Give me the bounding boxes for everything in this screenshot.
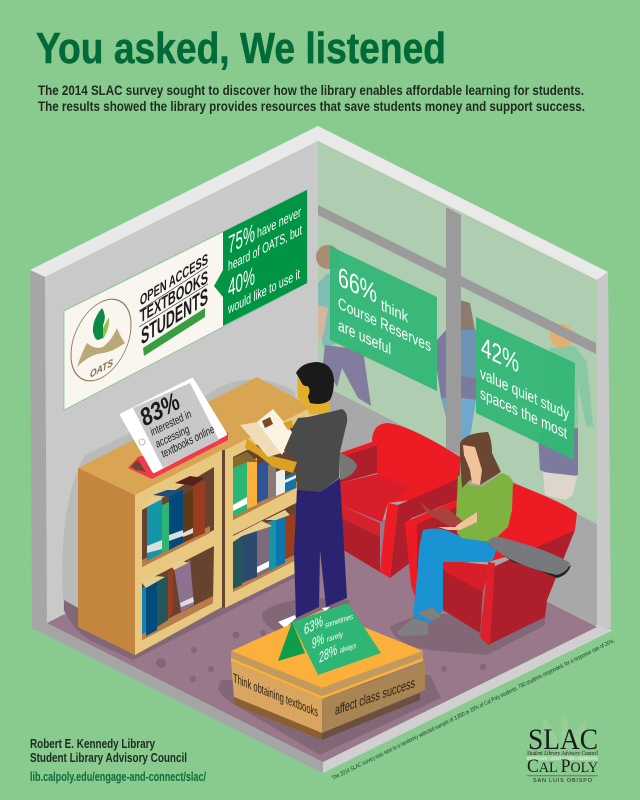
hair xyxy=(296,362,334,404)
books: left case, lower shelf xyxy=(142,560,194,636)
OATS statistics: have never xyxy=(257,205,301,242)
arm xyxy=(245,438,297,473)
tablet: 83% interested: interested in xyxy=(149,407,193,439)
box label left: Think obtaining textbooks xyxy=(233,670,318,720)
window mullions xyxy=(318,205,596,455)
box label right: affect class success xyxy=(335,675,415,719)
left sofa xyxy=(340,423,460,578)
display box xyxy=(231,610,425,740)
trousers xyxy=(294,478,347,618)
left arm xyxy=(340,442,377,457)
woman reading xyxy=(397,432,513,636)
right bookcase front xyxy=(222,407,312,608)
SLAC Cal Poly logo: SAN LUIS OBISPO xyxy=(533,778,593,784)
tent sign: frequency statistics: rarely xyxy=(327,630,344,644)
bookcase side xyxy=(78,468,135,655)
intro text xyxy=(38,83,585,114)
tablet: 83% interested: 83% xyxy=(137,386,183,432)
OATS logo xyxy=(71,287,131,393)
OATS statistics: 75% xyxy=(228,218,255,260)
tent sign: frequency statistics: 63% xyxy=(304,613,323,639)
man reading xyxy=(240,362,347,628)
shoes xyxy=(417,607,442,620)
SLAC Cal Poly logo: EDUCATE · ADVOCATE · IMPROVE xyxy=(527,756,598,761)
OATS statistics: would like to use it xyxy=(227,266,301,318)
left bookcase front xyxy=(135,450,222,655)
panel: 66% course reserves: 66% xyxy=(338,261,377,310)
left arm xyxy=(415,506,457,610)
tablet: 83% interested xyxy=(122,380,228,479)
panel: OATS banner xyxy=(64,190,307,410)
open book xyxy=(240,409,293,457)
floor shadows and marks xyxy=(64,555,545,755)
tent sign: frequency statistics xyxy=(278,603,381,675)
shirt xyxy=(286,409,347,492)
back xyxy=(440,483,577,562)
side table by man xyxy=(340,453,357,480)
back xyxy=(372,423,460,503)
book xyxy=(420,502,465,527)
ear xyxy=(304,386,310,396)
OATS logo: OATS xyxy=(90,357,114,381)
OATS statistics: heard of OATS, but xyxy=(228,222,303,275)
library credit: Robert E. Kennedy Library xyxy=(30,736,156,751)
tablet: 83% interested: accessing xyxy=(154,422,191,451)
panel: 42% quiet study: 42% xyxy=(481,331,519,380)
seat xyxy=(340,474,412,522)
right arm xyxy=(390,478,460,578)
books: right case, lower shelf xyxy=(233,510,296,589)
bookcases xyxy=(78,377,312,655)
shoes xyxy=(278,615,296,628)
OATS statistics xyxy=(227,205,303,318)
OATS statistics: 40% xyxy=(228,261,255,303)
books: right case, upper shelf xyxy=(233,452,296,517)
bookcase top xyxy=(78,377,312,495)
room shell xyxy=(30,126,613,773)
tent sign: frequency statistics: always xyxy=(340,641,356,655)
OATS wordmark xyxy=(139,250,208,356)
person right xyxy=(538,324,593,500)
hair xyxy=(460,432,501,488)
tent sign: frequency statistics: 9% xyxy=(312,631,324,653)
seat xyxy=(442,560,490,592)
people behind glass xyxy=(316,245,593,500)
library credit: lib.calpoly.edu/engage-and-connect/slac/ xyxy=(30,769,206,784)
hands xyxy=(438,512,477,530)
panel: 66% course reserves: Course Reserves xyxy=(338,294,431,356)
panel: 66% course reserves xyxy=(330,246,437,391)
panel: 66% course reserves: think xyxy=(381,296,408,327)
panel: 42% quiet study: value quiet study xyxy=(480,364,569,424)
title: You asked, We listened xyxy=(36,24,446,73)
SLAC Cal Poly logo: CAL POLY xyxy=(527,756,598,777)
jeans xyxy=(413,528,496,623)
library credit: Student Library Advisory Council xyxy=(30,750,187,765)
OATS wordmark: OPEN ACCESS xyxy=(140,250,208,310)
SLAC Cal Poly logo xyxy=(527,717,598,784)
library credit xyxy=(30,736,206,784)
tent sign: frequency statistics: sometimes xyxy=(325,612,353,630)
person middle xyxy=(437,300,476,442)
SLAC Cal Poly logo: SLAC xyxy=(528,723,598,756)
SLAC Cal Poly logo: Student Library Advisory Council xyxy=(527,750,598,757)
side table by woman xyxy=(487,537,571,578)
tent sign: frequency statistics: 28% xyxy=(319,642,337,667)
OATS wordmark: STUDENTS xyxy=(141,283,208,350)
right arm xyxy=(488,530,575,645)
neck and face xyxy=(297,377,330,415)
tablet: 83% interested: textbooks online xyxy=(160,422,216,461)
person left xyxy=(316,245,371,406)
right sofa xyxy=(405,483,577,645)
face xyxy=(463,445,482,485)
sweater xyxy=(456,473,513,542)
books: left case, upper shelf xyxy=(142,476,205,561)
panel: 66% course reserves: are useful xyxy=(338,316,391,359)
OATS wordmark: TEXTBOOKS xyxy=(140,267,208,328)
panel: 42% quiet study: spaces the most xyxy=(480,384,567,443)
panel: 42% quiet study xyxy=(476,317,575,460)
